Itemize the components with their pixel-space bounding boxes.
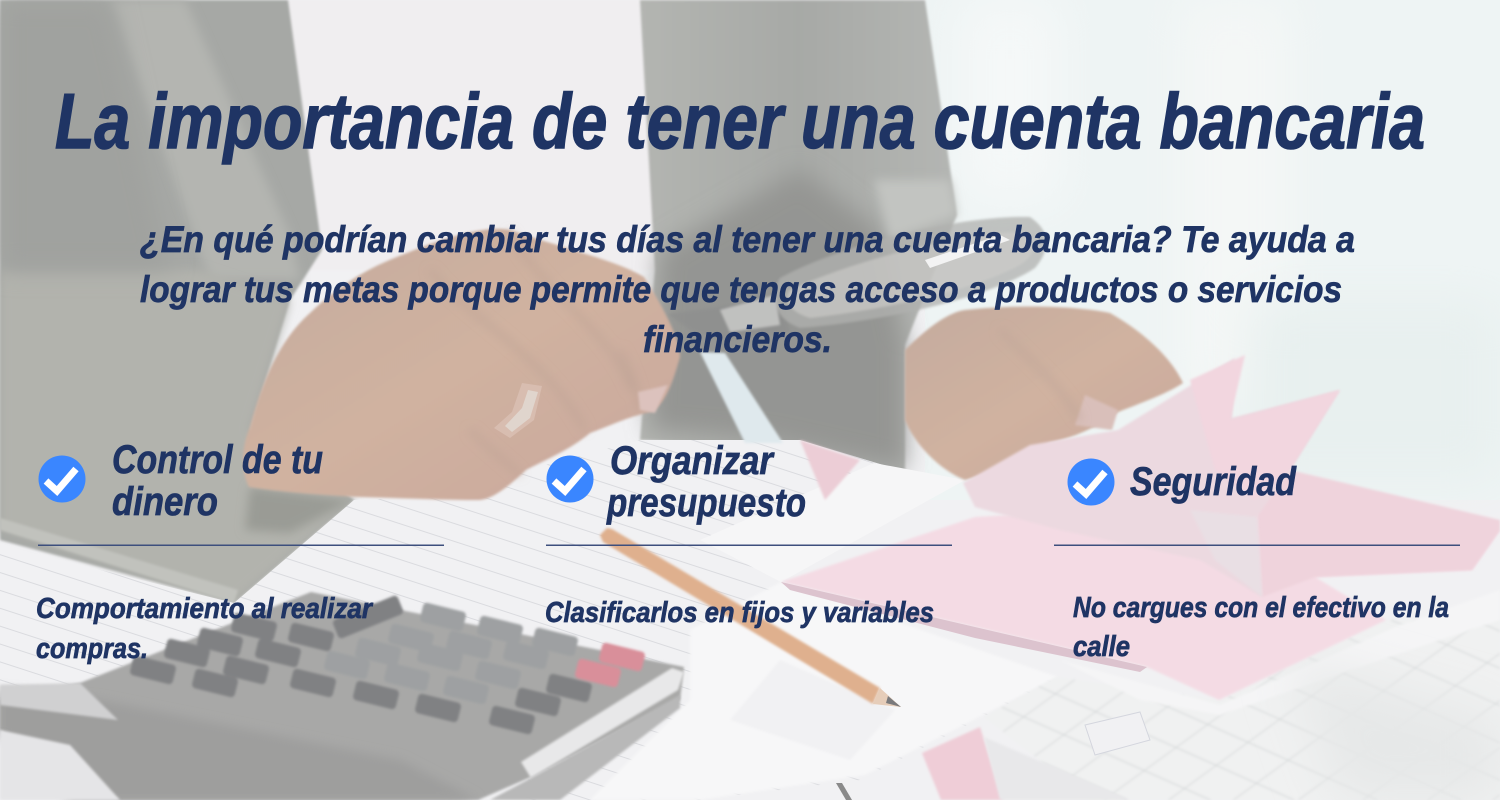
heading: control de tu dinero xyxy=(112,438,323,524)
text: comportamiento xyxy=(36,593,374,665)
column: control de tu dinero xyxy=(36,438,444,665)
intro paragraph: lograr tus metas porque permite que tengas acceso a productos o servicios xyxy=(140,269,1342,310)
heading: seguridad: Seguridad xyxy=(1130,460,1297,504)
text: comportamiento: compras. xyxy=(36,633,148,665)
paper sheets xyxy=(0,440,1060,800)
column: organizar presupuesto xyxy=(545,439,952,629)
right hand xyxy=(905,307,1183,480)
heading: organizar presupuesto xyxy=(606,439,806,525)
heading: control de tu dinero: Control de tu xyxy=(112,438,323,482)
ring xyxy=(494,383,542,438)
icon: check badge xyxy=(1068,458,1114,506)
calculator xyxy=(0,592,684,800)
heading: organizar presupuesto: Organizar xyxy=(610,439,775,483)
white sheet with table xyxy=(590,582,1058,800)
intro paragraph: ¿En qué podrían cambiar tus días al tener una cuenta bancaria? Te ayuda a xyxy=(140,219,1355,260)
column: seguridad xyxy=(1054,458,1460,663)
heading: control de tu dinero: dinero xyxy=(112,480,218,524)
pencil xyxy=(600,528,880,704)
heading: organizar presupuesto: presupuesto xyxy=(606,481,806,525)
jacket left xyxy=(0,0,354,603)
pink documents xyxy=(781,500,1500,700)
icon: check badge xyxy=(546,456,594,502)
text: clasificarlos: Clasificarlos en fijos y variables xyxy=(545,597,934,629)
intro paragraph: financieros. xyxy=(643,319,832,360)
grid paper xyxy=(984,620,1500,800)
left hand xyxy=(243,229,680,500)
finger shading xyxy=(430,232,640,475)
text: comportamiento: Comportamiento al realizar xyxy=(36,593,374,625)
intro paragraph xyxy=(140,219,1355,360)
magnifier xyxy=(668,298,790,340)
shirt xyxy=(285,0,660,270)
icon: check badge xyxy=(38,456,86,502)
text: no cargues xyxy=(1073,592,1449,663)
calculator keys xyxy=(129,595,646,735)
text: no cargues: calle xyxy=(1073,631,1130,663)
slip with numbers xyxy=(984,737,1130,800)
jacket right xyxy=(640,0,957,480)
